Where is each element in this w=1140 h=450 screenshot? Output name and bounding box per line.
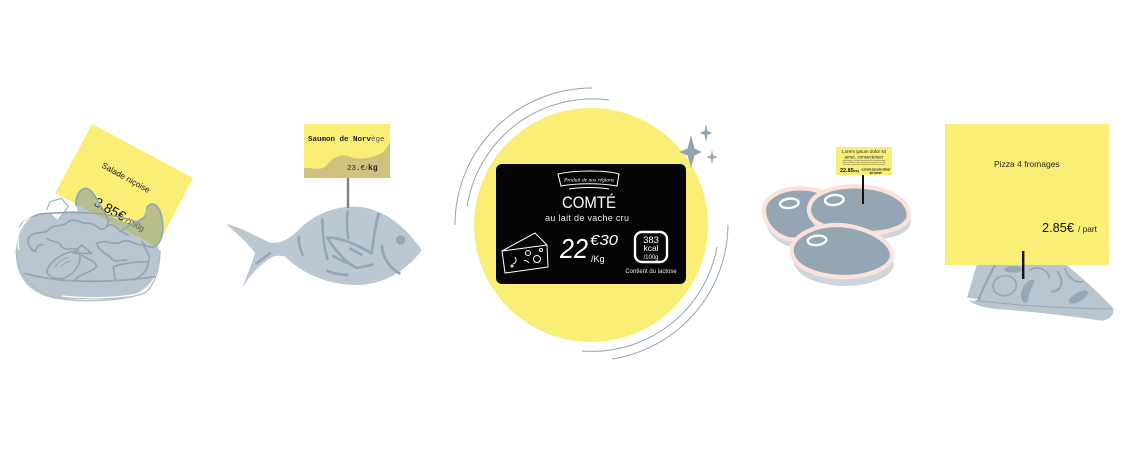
calorie badge: kcal <box>643 243 659 253</box>
price: 22 <box>559 233 588 264</box>
subtitle: au lait de vache cru <box>545 213 629 223</box>
panel: meat with price tag <box>764 147 911 286</box>
icon: cheese <box>502 233 548 273</box>
price tag: lorem ipsum <box>836 147 892 175</box>
price tag: lorem ipsum: 22.85€/Kg <box>840 168 860 174</box>
price <box>559 232 619 264</box>
calorie badge <box>635 232 667 262</box>
panel: fish with price tag <box>226 124 422 288</box>
stem <box>862 175 864 204</box>
price tag: salade niçoise <box>55 124 193 247</box>
bowl outline highlights <box>16 213 160 301</box>
note: lactose: Contient du lactose <box>625 269 677 275</box>
price tag: lorem ipsum: adipiscing elit, sed diam nonummy nibh euismod tincidunt <box>842 159 886 162</box>
price tag: lorem ipsum: amet, consectetuer <box>844 154 884 160</box>
heading: Comté: COMTÉ <box>562 193 616 212</box>
price: €30 <box>590 232 619 249</box>
panel: salad with price tag <box>16 124 193 301</box>
decorative arcs <box>455 88 728 359</box>
black price card <box>496 164 686 284</box>
calorie badge: 383 <box>643 235 659 246</box>
banner: produit de nos régions: Produit de nos régions <box>563 178 614 184</box>
price tag: pizza 4 fromages <box>945 124 1109 265</box>
price tag: lorem ipsum: ad minim veniam quis nostrud exerci tation ullamcorper <box>843 163 885 166</box>
calorie badge: /100g <box>643 255 659 261</box>
price tag: salade niçoise: Salade niçoise <box>100 160 152 195</box>
illustration: pizza slice <box>967 265 1113 321</box>
price tag: lorem ipsum: Lorem ipsum dolor sit <box>842 149 887 154</box>
yellow circle <box>474 108 708 342</box>
price tag: saumon de Norvège: Saumon de Norvège <box>308 136 385 144</box>
price tag: saumon de Norvège: 23.€/kg <box>347 164 378 173</box>
illustration: fish <box>226 207 422 288</box>
price tag: salade niçoise: /100g <box>124 216 146 233</box>
price tag: pizza 4 fromages: 2.85€ <box>1042 220 1074 235</box>
illustration: steaks <box>764 186 911 286</box>
banner: produit de nos régions <box>558 171 619 189</box>
price tag: lorem ipsum: ut laoreet dolore magna aliquam erat volutpat ut wisi enim <box>842 161 886 164</box>
panel: Comté central label <box>455 88 728 359</box>
stem <box>347 178 349 208</box>
price tag: lorem ipsum: sit amet. <box>870 171 883 175</box>
price: /Kg <box>591 254 605 264</box>
price tag: salade niçoise: 3.85€ <box>92 195 129 224</box>
panel: pizza with price tag <box>945 124 1113 321</box>
illustration: salad bowl <box>16 188 163 299</box>
price tag: pizza 4 fromages: Pizza 4 fromages <box>994 159 1060 169</box>
stem <box>1022 251 1024 279</box>
price tag: pizza 4 fromages: / part <box>1078 224 1098 234</box>
price tag: saumon de Norvège <box>304 124 390 178</box>
price tag: lorem ipsum: Lorem ipsum dolor <box>862 168 891 172</box>
icon: sparkles <box>679 124 718 168</box>
